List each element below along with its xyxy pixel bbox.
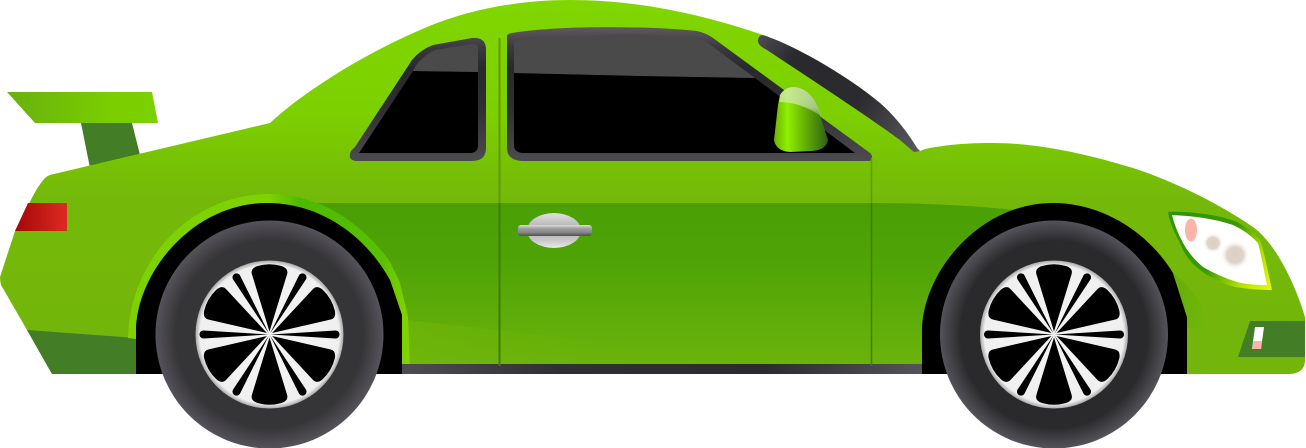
door seams bbox=[500, 38, 872, 366]
fog lamp panel bbox=[1238, 321, 1305, 357]
windshield pillar bbox=[758, 35, 920, 152]
rear wheel arch bbox=[136, 203, 402, 374]
spoiler wing bbox=[7, 92, 158, 123]
rear wheel bbox=[156, 220, 384, 448]
front wheel bbox=[940, 220, 1168, 448]
door handle bbox=[518, 213, 592, 248]
front fender shading bbox=[1173, 273, 1207, 328]
spoiler strut bbox=[81, 123, 140, 168]
front side window bbox=[507, 27, 872, 161]
headlight bbox=[1168, 212, 1272, 290]
rear wheel arch highlight bbox=[128, 194, 410, 364]
tail light bbox=[15, 203, 67, 231]
sill bbox=[402, 364, 922, 374]
side mirror bbox=[774, 87, 828, 152]
front wheel arch bbox=[922, 203, 1187, 374]
lower body light sweep bbox=[408, 320, 640, 364]
rear side window bbox=[350, 38, 486, 161]
rear bumper skirt bbox=[27, 330, 136, 374]
lower body shaded band bbox=[290, 203, 1015, 364]
